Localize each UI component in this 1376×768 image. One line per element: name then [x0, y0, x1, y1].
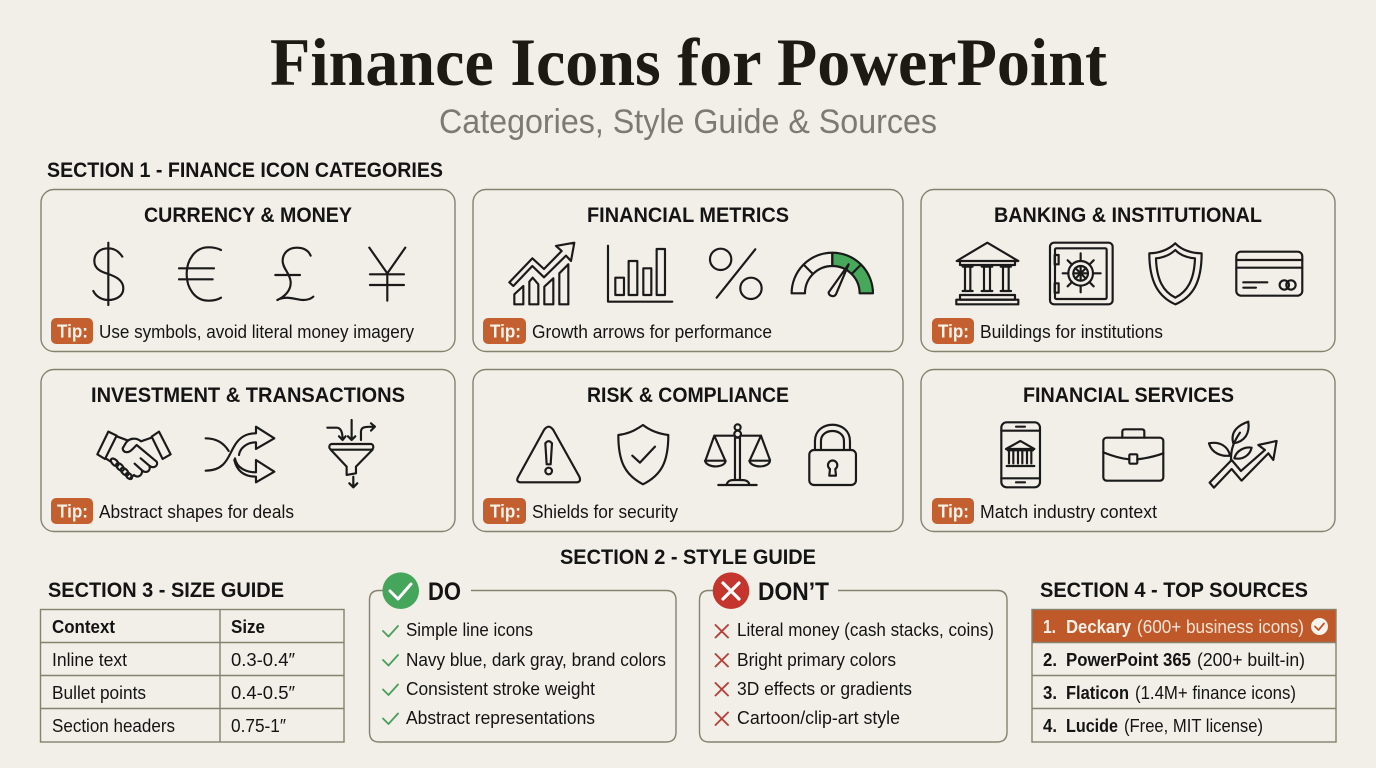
source 4: lucide: 4. — [1043, 716, 1057, 736]
source 2: powerpoint 365 — [1043, 650, 1305, 670]
tip: risk: Shields for security — [532, 502, 678, 522]
panel: risk and compliance — [473, 370, 903, 532]
table header row: Size — [231, 617, 265, 637]
source 1: deckary: 1. — [1043, 617, 1056, 637]
row: bullet points: 0.4-0.5″ — [231, 683, 296, 703]
icon: briefcase — [1103, 429, 1163, 481]
icon: yen — [369, 248, 405, 301]
tip: metrics: Tip: — [490, 322, 521, 342]
tip: metrics: Growth arrows for performance — [532, 322, 772, 342]
icon: plant and growth arrow — [1209, 422, 1277, 488]
panel: do — [370, 572, 676, 742]
source 1: deckary: (600+ business icons) — [1137, 617, 1304, 637]
don't list: Cartoon/clip-art style — [737, 708, 900, 728]
icon: mobile banking phone — [1001, 422, 1040, 487]
icon: red cross badge — [713, 572, 749, 609]
tip: currency: Use symbols, avoid literal money imagery — [99, 322, 414, 342]
title: Finance Icons for PowerPoint — [270, 24, 1107, 100]
don't list — [716, 620, 994, 728]
subtitle: Categories, Style Guide & Sources — [439, 103, 937, 141]
tip: currency — [51, 318, 414, 344]
heading: section 3: SECTION 3 - SIZE GUIDE — [48, 579, 284, 602]
table: size guide — [40, 610, 344, 742]
source 3: flaticon: (1.4M+ finance icons) — [1135, 683, 1296, 703]
panel heading: risk and compliance: RISK & COMPLIANCE — [587, 384, 789, 407]
source 4: lucide: (Free, MIT license) — [1124, 716, 1263, 736]
panel: financial metrics — [473, 190, 903, 352]
do heading: DO — [428, 578, 461, 606]
panel: investment and transactions — [41, 370, 455, 532]
do list: Abstract representations — [406, 708, 595, 728]
icon: euro — [179, 247, 221, 301]
panel heading: investment and transactions: INVESTMENT & TRANSACTIONS — [91, 384, 405, 407]
panel heading: financial metrics: FINANCIAL METRICS — [587, 204, 789, 227]
source 4: lucide: Lucide — [1066, 716, 1118, 736]
source 3: flaticon: Flaticon — [1066, 683, 1129, 703]
icon: credit card — [1236, 252, 1302, 296]
tip: investment: Abstract shapes for deals — [99, 502, 294, 522]
don't list: 3D effects or gradients — [737, 679, 912, 699]
heading: section 1: SECTION 1 - FINANCE ICON CATEGORIES — [47, 159, 443, 182]
tip: services — [932, 498, 1157, 524]
row: inline text: Inline text — [52, 650, 127, 670]
icon: padlock — [809, 425, 856, 485]
icon: pound — [275, 248, 313, 300]
icon: funnel — [327, 420, 375, 487]
tip: services: Tip: — [938, 502, 969, 522]
icon: bank building — [956, 243, 1018, 304]
tip: risk — [483, 498, 678, 524]
tip: investment — [51, 498, 294, 524]
tip: banking — [932, 318, 1163, 344]
source 3: flaticon — [1043, 683, 1296, 703]
icon: gauge — [792, 253, 873, 296]
row: bullet points — [52, 683, 296, 703]
do list: Consistent stroke weight — [406, 679, 595, 699]
source 2: powerpoint 365: 2. — [1043, 650, 1057, 670]
source 3: flaticon: 3. — [1043, 683, 1057, 703]
tip: services: Match industry context — [980, 502, 1157, 522]
tip: risk: Tip: — [490, 502, 521, 522]
heading: section 2: SECTION 2 - STYLE GUIDE — [560, 546, 816, 569]
do list: Navy blue, dark gray, brand colors — [406, 650, 666, 670]
don't heading: DON’T — [758, 578, 829, 606]
panel heading: banking and institutional: BANKING & INSTITUTIONAL — [994, 204, 1262, 227]
do list — [383, 620, 666, 728]
table header row — [52, 617, 265, 637]
icon: dollar — [93, 243, 123, 305]
row: inline text: 0.3-0.4″ — [231, 650, 296, 670]
panel: banking and institutional — [921, 190, 1335, 352]
do list: Simple line icons — [406, 620, 533, 640]
tip: banking: Buildings for institutions — [980, 322, 1163, 342]
tip: investment: Tip: — [57, 502, 88, 522]
icon: growth arrow with bars — [509, 243, 574, 304]
row: section headers: 0.75-1″ — [231, 716, 287, 736]
panel: financial services — [921, 370, 1335, 532]
row: section headers — [52, 716, 287, 736]
icon: bar chart — [608, 246, 672, 302]
icon: percent — [710, 249, 762, 299]
source 1: deckary — [1043, 617, 1328, 637]
tip: banking: Tip: — [938, 322, 969, 342]
icon: handshake — [97, 432, 171, 480]
icon: safe — [1050, 243, 1113, 304]
row: inline text — [52, 650, 296, 670]
panel heading: currency and money: CURRENCY & MONEY — [144, 204, 352, 227]
icon: crossing arrows — [206, 427, 274, 482]
panel: currency and money — [41, 190, 455, 352]
heading: section 4: SECTION 4 - TOP SOURCES — [1040, 579, 1308, 602]
row: bullet points: Bullet points — [52, 683, 146, 703]
icon: shield check — [618, 425, 668, 484]
table: top sources — [1032, 610, 1336, 742]
tip: metrics — [483, 318, 772, 344]
panel heading: financial services: FINANCIAL SERVICES — [1023, 384, 1234, 407]
source 2: powerpoint 365: (200+ built-in) — [1197, 650, 1305, 670]
tip: currency: Tip: — [57, 322, 88, 342]
don't list: Bright primary colors — [737, 650, 896, 670]
source 2: powerpoint 365: PowerPoint 365 — [1066, 650, 1191, 670]
icon: balance scales — [705, 424, 770, 485]
icon: shield — [1149, 243, 1202, 304]
source 4: lucide — [1043, 716, 1263, 736]
source 1: deckary: Deckary — [1066, 617, 1131, 637]
don't list: Literal money (cash stacks, coins) — [737, 620, 994, 640]
table header row: Context — [52, 617, 115, 637]
row: section headers: Section headers — [52, 716, 175, 736]
panel: don't — [700, 572, 1007, 742]
icon: green check badge — [382, 572, 419, 609]
icon: warning triangle — [517, 427, 580, 482]
